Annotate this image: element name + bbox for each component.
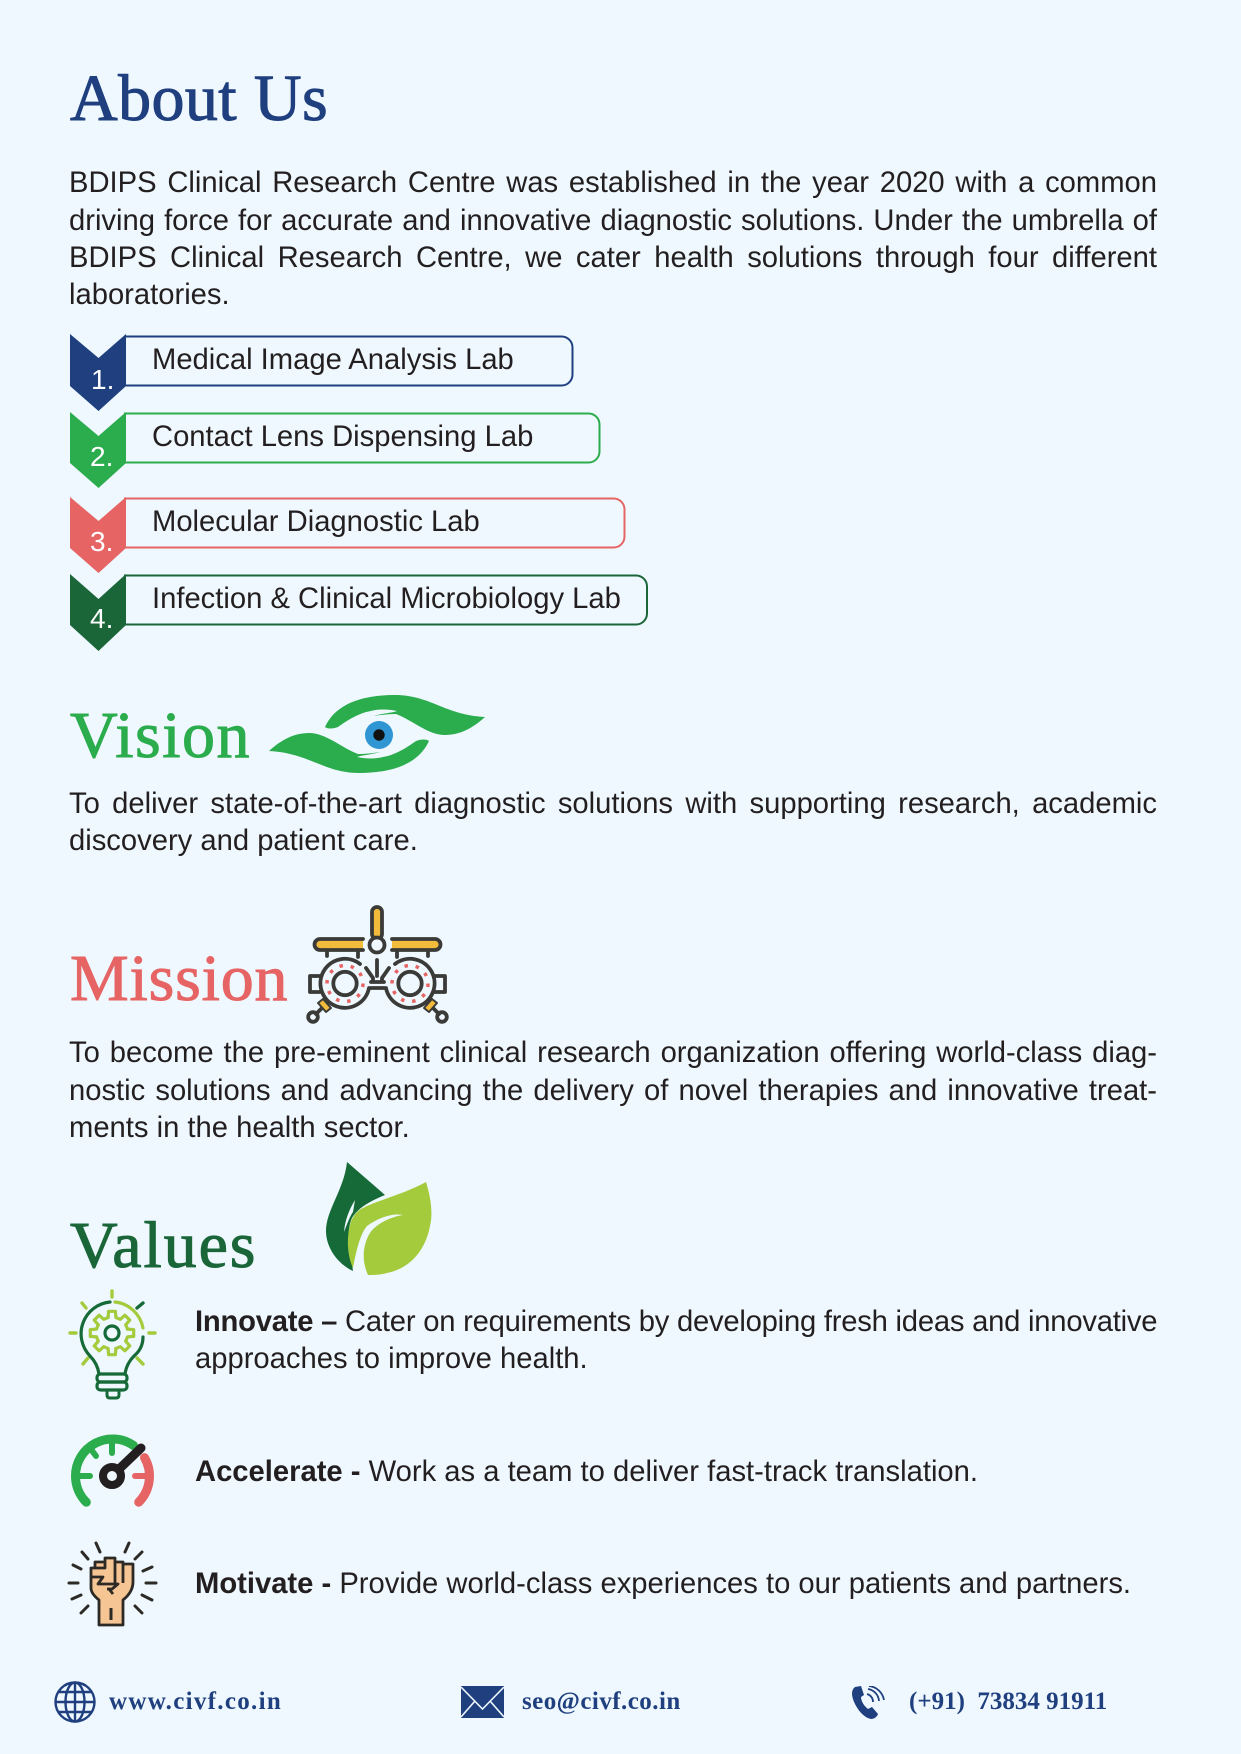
list item 2: Contact Lens Dispensing Lab <box>70 412 600 488</box>
email address: seo@civf.co.in <box>522 1688 681 1715</box>
icon: telephone <box>852 1686 885 1719</box>
text block: vision statement <box>69 788 1157 857</box>
text block: about paragraph <box>69 167 1158 311</box>
icon: light bulb with gear <box>68 1289 157 1400</box>
list item 4: Infection & Clinical Microbiology Lab: 4. <box>90 603 113 634</box>
text block: about paragraph: BDIPS Clinical Research Centre, we cater health solutions through four different <box>69 242 1157 274</box>
text block: Motivate value: Motivate - Provide world-class experiences to our patients and partners. <box>195 1568 1131 1600</box>
text block: mission statement <box>69 1037 1157 1144</box>
text block: vision statement: To deliver state-of-the-art diagnostic solutions with supporting research, academic <box>69 788 1157 820</box>
list item 3: Molecular Diagnostic Lab: Molecular Diagnostic Lab <box>152 506 480 538</box>
text block: Innovate value: approaches to improve health. <box>195 1343 588 1375</box>
list item 2: Contact Lens Dispensing Lab: Contact Lens Dispensing Lab <box>152 421 533 453</box>
website address: www.civf.co.in <box>109 1688 282 1715</box>
icon: speedometer gauge <box>71 1434 154 1507</box>
list item 2: Contact Lens Dispensing Lab: 2. <box>90 441 113 472</box>
list item 4: Infection & Clinical Microbiology Lab: Infection & Clinical Microbiology Lab <box>152 583 621 615</box>
list item 1: Medical Image Analysis Lab: 1. <box>91 364 114 395</box>
phone number: (+91) 73834 91911 <box>909 1688 1107 1715</box>
heading: Mission: Mission <box>70 942 288 1015</box>
footer: website <box>54 1681 282 1723</box>
text block: Innovate value: Innovate – Cater on requirements by developing fresh ideas and innovative <box>195 1306 1157 1338</box>
footer: email <box>461 1686 681 1718</box>
heading: Vision: Vision <box>70 699 251 772</box>
list item 4: Infection & Clinical Microbiology Lab <box>70 574 647 651</box>
list item 3: Molecular Diagnostic Lab: 3. <box>90 526 113 557</box>
heading: About Us: About Us <box>70 62 328 134</box>
list item 3: Molecular Diagnostic Lab <box>70 497 624 573</box>
heading: Values: Values <box>70 1209 257 1282</box>
icon: two leaves <box>326 1162 432 1275</box>
icon: optical trial frame <box>306 905 449 1024</box>
list item 1: Medical Image Analysis Lab: Medical Image Analysis Lab <box>152 344 514 376</box>
icon: envelope <box>461 1686 504 1718</box>
text block: mission statement: nostic solutions and advancing the delivery of novel therapies and innovative treat- <box>69 1074 1157 1106</box>
text block: Accelerate value: Accelerate - Work as a team to deliver fast-track translation. <box>195 1456 978 1488</box>
icon: eye held by green hands <box>269 695 485 773</box>
text block: vision statement: discovery and patient care. <box>69 825 418 857</box>
numbered list: laboratories <box>70 334 648 651</box>
list item 1: Medical Image Analysis Lab <box>70 334 572 411</box>
icon: raised fist with rays <box>68 1542 158 1626</box>
text block: mission statement: ments in the health sector. <box>69 1112 410 1144</box>
text block: mission statement: To become the pre-eminent clinical research organization offering world-class diag- <box>69 1037 1157 1069</box>
text block: about paragraph: BDIPS Clinical Research Centre was established in the year 2020 with a common <box>69 167 1157 199</box>
text block: about paragraph: driving force for accurate and innovative diagnostic solutions. Under the umbrella of <box>69 205 1157 237</box>
icon: globe <box>54 1681 96 1723</box>
footer: phone <box>852 1686 1107 1719</box>
text block: Innovate value <box>195 1306 1157 1375</box>
text block: about paragraph: laboratories. <box>69 279 230 311</box>
